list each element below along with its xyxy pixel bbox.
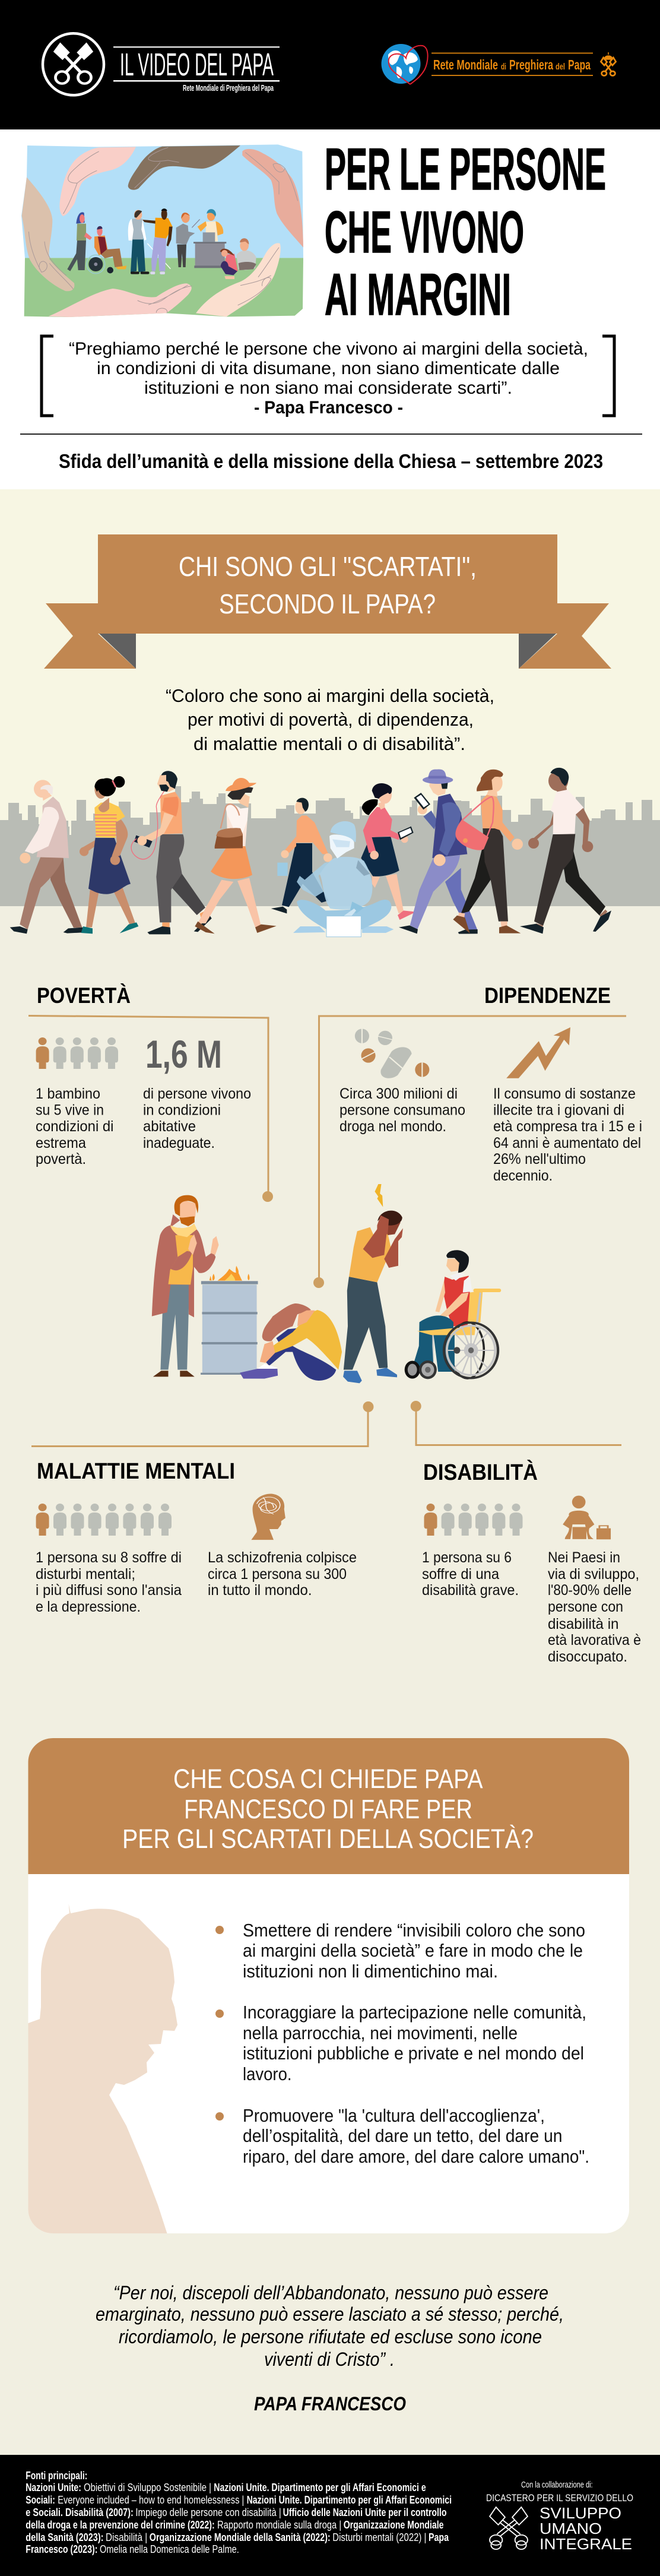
text: mental disorders (36, 1549, 182, 1615)
prayer quote with brackets: in condizioni di vita disumane, non siano dimenticate dalle (97, 359, 560, 378)
heading: DISABILITÀ (423, 1459, 538, 1485)
text: child poverty: povertà. (36, 1151, 86, 1167)
text: drug users: droga nel mondo. (339, 1118, 446, 1135)
closing quote: viventi di Cristo” . (264, 2349, 395, 2370)
sky and lawn (21, 144, 303, 317)
city skyline (0, 786, 660, 906)
ribbon heading (44, 534, 611, 669)
title: AI MARGINI (325, 261, 511, 327)
woman in yellow (80, 776, 138, 933)
text: mental disorders: disturbi mentali; (36, 1566, 135, 1583)
text: unemployment: persone con (548, 1599, 623, 1615)
sources: Omelia nella Domenica delle Palme. (100, 2543, 239, 2555)
seated beggar (293, 821, 394, 937)
text: housing: abitative (143, 1118, 196, 1135)
text: drug users: Circa 300 milioni di (339, 1086, 458, 1102)
text: severe disability: 1 persona su 6 (422, 1549, 512, 1566)
text: housing (143, 1086, 251, 1151)
bullet 3: Promuovere "la 'cultura dell'accoglienza', (243, 2105, 545, 2126)
connector line (411, 1401, 621, 1445)
card heading: CHE COSA CI CHIEDE PAPA (173, 1764, 483, 1794)
logo: Rete Mondiale di Preghiera del Papa: Preghiera (509, 57, 553, 72)
woman with red bag (453, 770, 523, 933)
text: housing: inadeguate. (143, 1135, 215, 1151)
woman with hat (194, 778, 277, 933)
text: drug users: persone consumano (339, 1102, 465, 1119)
text: unemployment: via di sviluppo, (548, 1566, 639, 1583)
bullet 2: nella parrocchia, nei movimenti, nelle (243, 2023, 518, 2043)
bullet 1: istituzioni non li dimentichino mai. (243, 1961, 498, 1982)
sources: Everyone included – how to end homelessness | (58, 2494, 244, 2506)
sources: Nazioni Unite: (26, 2482, 81, 2493)
logo: Rete Mondiale di Preghiera del Papa: Rete Mondiale (433, 57, 498, 72)
pictogram: 1 child in 5 (36, 1037, 118, 1069)
icon: rising arrow (506, 1027, 570, 1078)
logo: Rete Mondiale di Preghiera del Papa: Papa (568, 57, 591, 72)
logo: Sviluppo Umano Integrale: SVILUPPO (540, 2504, 621, 2522)
woman in wheelchair (405, 1250, 501, 1379)
ribbon heading: SECONDO IL PAPA? (219, 588, 436, 619)
text: mental disorders: i più diffusi sono l'ansia (36, 1582, 182, 1599)
text: youth consumption: 64 anni è aumentato del (493, 1135, 641, 1151)
sources: Disabilità | (106, 2531, 147, 2543)
woman in pink (361, 783, 416, 920)
text: mental disorders: e la depressione. (36, 1599, 141, 1615)
definition quote: per motivi di povertà, di dipendenza, (188, 709, 474, 730)
text: schizophrenia: La schizofrenia colpisce (208, 1549, 357, 1566)
sources: Organizzazione Mondiale (344, 2519, 444, 2531)
closing quote (96, 2282, 564, 2414)
card heading: FRANCESCO DI FARE PER (184, 1794, 472, 1824)
footer band (0, 2455, 660, 2576)
logo: Il Video del Papa: Rete Mondiale di Preghiera del Papa (183, 83, 274, 93)
walking people, right group (293, 768, 611, 937)
connector line (28, 1015, 273, 1202)
panel: what the Pope asks (28, 1738, 629, 2233)
card heading (28, 1738, 629, 1874)
logo: Il Video del Papa (43, 33, 280, 95)
text: youth consumption: illecite tra i giovani di (493, 1102, 624, 1119)
central illustration: four people (152, 1184, 501, 1383)
sources: Obiettivi di Sviluppo Sostenibile | (84, 2482, 211, 2493)
prayer quote with brackets: - Papa Francesco - (254, 398, 403, 417)
panel: mental illness (31, 1401, 374, 1615)
text: youth consumption (493, 1086, 642, 1184)
burning barrel (201, 1266, 258, 1375)
text: severe disability (422, 1549, 519, 1599)
bullet 2: lavoro. (243, 2064, 292, 2084)
sources: Fonti principali: (26, 2470, 87, 2482)
definition quote (166, 685, 494, 754)
closing quote: “Per noi, discepoli dell’Abbandonato, nessuno può essere (113, 2282, 548, 2303)
text: unemployment (548, 1549, 641, 1665)
logo: Rete Mondiale di Preghiera del Papa: di (501, 62, 506, 72)
man in white (520, 768, 611, 933)
heading: POVERTÀ (37, 983, 131, 1008)
closing quote: PAPA FRANCESCO (254, 2393, 406, 2414)
closing quote: emarginato, nessuno può essere lasciato a sé stesso; perché, (96, 2303, 564, 2325)
statistic: 1,6 M (145, 1032, 222, 1076)
text: child poverty: condizioni di (36, 1118, 114, 1135)
boy (271, 798, 332, 913)
pictogram: 1 person in 6 (424, 1504, 522, 1536)
sources: Nazioni Unite. Dipartimento per gli Affari Economici (247, 2494, 452, 2506)
text: unemployment: età lavorativa è (548, 1632, 641, 1648)
man warming at barrel (152, 1195, 219, 1376)
sources: Sociali: (26, 2494, 55, 2506)
icon: head with tangled thoughts (251, 1494, 285, 1540)
pictogram: 1 person in 8 (36, 1504, 172, 1536)
connector line (313, 1016, 626, 1288)
card heading: PER GLI SCARTATI DELLA SOCIETÀ? (122, 1824, 534, 1854)
beggar's cup (277, 863, 288, 876)
closing quote: ricordiamolo, le persone rifiutate ed escluse sono icone (119, 2326, 542, 2347)
bullet list (215, 1920, 589, 2167)
prayer quote with brackets: “Preghiamo perché le persone che vivono ai margini della società, (69, 339, 588, 359)
text: child poverty: estrema (36, 1135, 86, 1151)
text: youth consumption: età compresa tra i 15 e i (493, 1118, 642, 1135)
text: youth consumption: decennio. (493, 1167, 553, 1184)
seated woman (240, 1303, 342, 1381)
sources: della Sanità (2023): (26, 2531, 103, 2543)
subtitle: Sfida dell’umanità e della missione della Chiesa – settembre 2023 (59, 450, 603, 472)
text: child poverty: su 5 vive in (36, 1102, 104, 1119)
man in blue (399, 769, 478, 934)
panel: addictions (313, 983, 642, 1288)
walking people, left group (10, 771, 332, 934)
text: severe disability: soffre di una (422, 1566, 499, 1583)
distressed man (343, 1211, 403, 1383)
hands (22, 145, 303, 317)
sources: Francesco (2023): (26, 2543, 97, 2555)
sources: Impiego delle persone con disabilità | (135, 2507, 281, 2518)
logo: Il Video del Papa: IL VIDEO DEL PAPA (120, 47, 274, 83)
old man (10, 780, 82, 933)
connector line (31, 1401, 374, 1447)
definition quote: “Coloro che sono ai margini della società, (166, 685, 494, 706)
text: housing: di persone vivono (143, 1086, 251, 1102)
text: child poverty (36, 1086, 114, 1167)
logo: Sviluppo Umano Integrale: DICASTERO PER IL SERVIZIO DELLO (486, 2492, 633, 2504)
sources: Papa (429, 2531, 449, 2543)
text: unemployment: Nei Paesi in (548, 1549, 620, 1566)
title (325, 136, 606, 327)
text: mental disorders: 1 persona su 8 soffre di (36, 1549, 182, 1566)
panel: disability (411, 1401, 641, 1665)
people group (67, 208, 256, 279)
bullet 2 (215, 2002, 586, 2084)
text: unemployment: disoccupato. (548, 1648, 627, 1665)
sources: Organizzazione Mondiale della Sanità (2022): (150, 2531, 331, 2543)
bullet 3 (215, 2105, 589, 2167)
icon: unemployed worker (563, 1496, 611, 1539)
logo: Sviluppo Umano Integrale: UMANO (540, 2520, 602, 2537)
text: unemployment: l'80-90% delle (548, 1582, 632, 1599)
sources: Disturbi mentali (2022) | (332, 2531, 426, 2543)
prayer quote with brackets: istituzioni e non siano mai considerate scarti”. (144, 378, 512, 398)
sources (26, 2470, 452, 2555)
definition quote: di malattie mentali o di disabilità”. (193, 733, 465, 754)
prayer quote with brackets (42, 336, 614, 417)
icon: pills (355, 1028, 429, 1078)
text: schizophrenia: circa 1 persona su 300 (208, 1566, 347, 1583)
logo: Sviluppo Umano Integrale: INTEGRALE (540, 2535, 632, 2553)
sources: Ufficio delle Nazioni Unite per il controllo (283, 2507, 446, 2518)
sources: e Sociali. Disabilità (2007): (26, 2507, 134, 2518)
text: drug users (339, 1086, 465, 1135)
bullet 3: riparo, del dare amore, del dare calore umano". (243, 2146, 589, 2167)
bullet 3: dell’ospitalità, del dare un tetto, del dare un (243, 2125, 563, 2146)
logo: Rete Mondiale di Preghiera del Papa: del (556, 62, 565, 72)
bullet 2: istituzioni pubbliche e private e nel mondo del (243, 2043, 584, 2064)
text: unemployment: disabilità in (548, 1616, 618, 1632)
text: youth consumption: 26% nell'ultimo (493, 1151, 586, 1167)
sources: Nazioni Unite. Dipartimento per gli Affari Economici e (214, 2482, 426, 2493)
heading: MALATTIE MENTALI (37, 1459, 235, 1484)
text: schizophrenia (208, 1549, 357, 1599)
sources: della droga e la prevenzione del crimine (2022): (26, 2519, 215, 2531)
sources: Rapporto mondiale sulla droga | (217, 2519, 341, 2531)
logo: Rete Mondiale di Preghiera del Papa (381, 44, 616, 84)
text: youth consumption: Il consumo di sostanze (493, 1086, 636, 1102)
bullet 1: ai margini della società” e fare in modo che le (243, 1940, 583, 1961)
logo: Sviluppo Umano Integrale (486, 2480, 633, 2553)
bullet 2: Incoraggiare la partecipazione nelle comunità, (243, 2002, 586, 2023)
man with headphones (131, 771, 205, 934)
text: housing: in condizioni (143, 1102, 221, 1119)
hero illustration: hands around people (21, 144, 303, 317)
text: child poverty: 1 bambino (36, 1086, 100, 1102)
logo: Sviluppo Umano Integrale: Con la collaborazione di: (521, 2480, 593, 2490)
lightning bolt (375, 1184, 383, 1207)
text: severe disability: disabilità grave. (422, 1582, 519, 1599)
ribbon heading: CHI SONO GLI "SCARTATI", (179, 551, 477, 582)
text: schizophrenia: in tutto il mondo. (208, 1582, 312, 1599)
bullet 1 (215, 1920, 585, 1982)
silhouette of Pope Francis (28, 1904, 177, 2233)
bullet 1: Smettere di rendere “invisibili coloro che sono (243, 1920, 585, 1941)
card body (28, 1874, 629, 2233)
heading: DIPENDENZE (484, 983, 611, 1008)
panel: poverty (28, 983, 273, 1202)
header band (0, 0, 660, 129)
